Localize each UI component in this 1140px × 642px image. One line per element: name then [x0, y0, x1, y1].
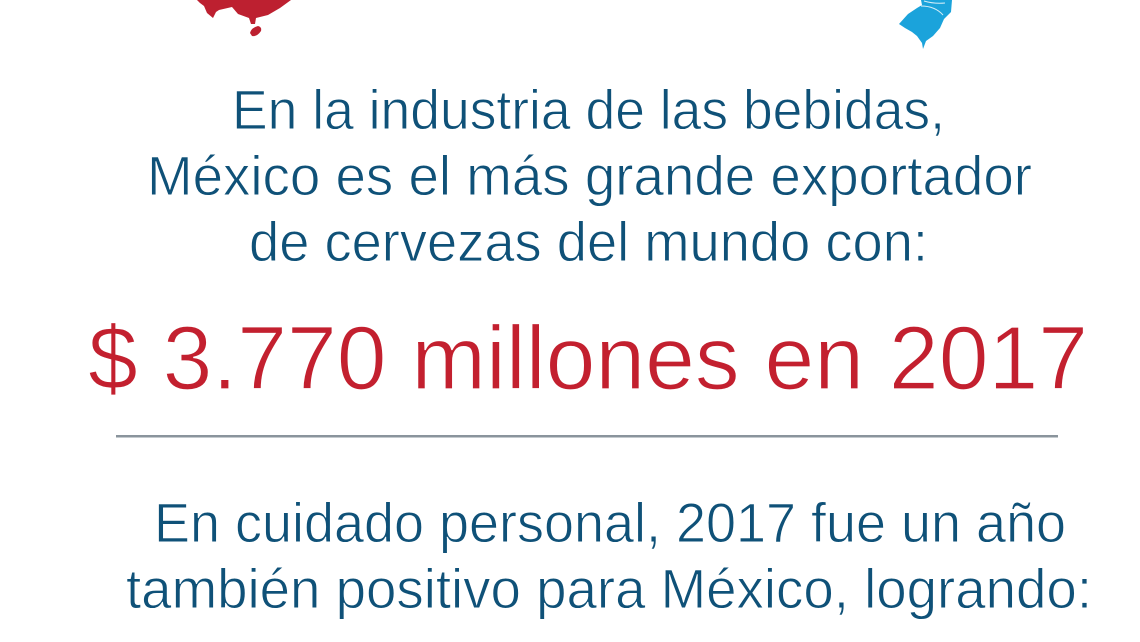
icon: blue map fragment: [899, 0, 952, 49]
text block: beverage industry intro: México es el más grande exportador: [147, 144, 1032, 207]
text block: personal care intro: [126, 491, 1092, 620]
text block: beverage industry intro: de cervezas del mundo con:: [249, 210, 928, 273]
headline figure: export value: $ 3.770 millones en 2017: [88, 309, 1088, 409]
text block: personal care intro: también positivo para México, logrando:: [126, 557, 1092, 620]
icon: red map fragment: [197, 0, 291, 36]
text block: beverage industry intro: [147, 78, 1032, 273]
text block: beverage industry intro: En la industria de las bebidas,: [232, 78, 945, 141]
text block: personal care intro: En cuidado personal, 2017 fue un año: [154, 491, 1066, 554]
